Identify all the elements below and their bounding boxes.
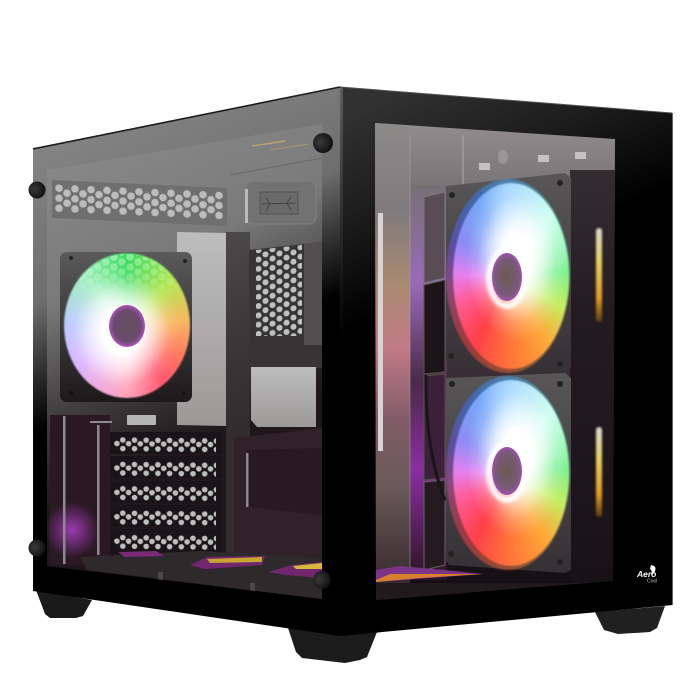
left rainbow column xyxy=(375,123,410,601)
mounting screws xyxy=(28,133,333,589)
right window interior xyxy=(375,120,617,605)
pci slots xyxy=(110,432,222,553)
left glass panel xyxy=(33,87,340,636)
panel edges xyxy=(33,87,672,605)
small slot xyxy=(127,415,156,425)
fan frames right xyxy=(446,173,571,573)
overlay details xyxy=(28,133,657,589)
light cut-out lower xyxy=(251,367,316,427)
right dark rear xyxy=(570,170,615,512)
top rear ports xyxy=(410,135,586,580)
perforated top band xyxy=(52,180,227,226)
left fan frame xyxy=(60,252,192,402)
ceiling highlights xyxy=(230,141,322,175)
cable channels xyxy=(424,192,445,570)
feet xyxy=(36,590,665,663)
case body and interior xyxy=(32,86,673,663)
white light strip xyxy=(378,213,383,451)
product image: PC case xyxy=(28,86,673,663)
orange floor slab xyxy=(376,566,585,600)
light strips xyxy=(596,228,602,517)
bottom fans xyxy=(80,551,322,599)
magenta channel xyxy=(410,185,447,580)
brand logo: Aero xyxy=(636,569,656,579)
lower right panel xyxy=(234,428,322,560)
left RGB fan xyxy=(64,253,190,398)
brand logo xyxy=(636,565,657,584)
dark vertical divider xyxy=(226,232,250,562)
light cut-out strip xyxy=(177,232,226,426)
drive bracket xyxy=(245,181,316,224)
brand logo: Cool xyxy=(647,578,657,584)
lower right fan outer glow xyxy=(446,376,570,570)
upper right fan outer glow xyxy=(446,179,570,373)
lower right RGB fan xyxy=(453,380,569,566)
left window interior xyxy=(45,120,323,610)
fan hubs xyxy=(109,253,522,495)
left purple panel xyxy=(45,415,112,565)
right glass panel xyxy=(340,87,673,636)
upper right RGB fan xyxy=(453,183,569,369)
mesh panel xyxy=(249,242,322,368)
hex grille over left fan xyxy=(76,254,180,294)
fan hub white rings xyxy=(489,250,525,500)
